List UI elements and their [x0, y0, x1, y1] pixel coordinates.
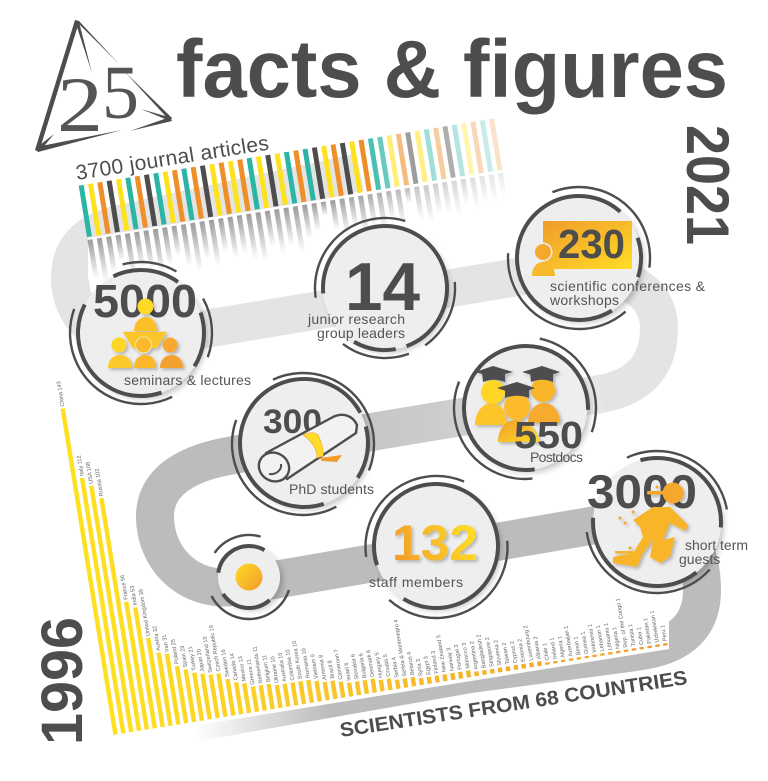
road: winding path — [70, 172, 702, 736]
icon: three graduates — [475, 366, 560, 442]
label: PhD students: PhD students — [289, 481, 374, 497]
chart labels: Bangladesh 2 — [476, 634, 488, 669]
chart labels: Nigeria 1 — [612, 626, 622, 649]
chart labels: Egypt 3 — [423, 656, 432, 675]
label: short term guests: short term — [685, 537, 748, 553]
chart labels: Canada 14 — [229, 653, 240, 681]
chart labels: Switzerland 19 — [202, 636, 214, 673]
chart labels: Portugal 3 — [454, 644, 464, 670]
chart labels: Turkey 21 — [188, 646, 198, 671]
chart labels: Lebanon 1 — [596, 625, 606, 652]
chart bars — [63, 319, 666, 735]
logo: triangle with 25 — [35, 20, 172, 152]
white mask under article bars — [88, 170, 500, 285]
chart labels: Armenia 8 — [318, 654, 328, 680]
chart title: SCIENTISTS FROM 68 COUNTRIES — [338, 667, 689, 742]
chart labels: Romania 10 — [301, 648, 312, 678]
chart labels: Chile 1 — [542, 643, 551, 661]
label: seminars and lectures: seminars & lectures — [124, 372, 251, 388]
chart labels: Japan 20 — [196, 648, 206, 672]
chart labels: New Zealand 3 — [436, 635, 448, 673]
chart labels: Greece 11 — [246, 659, 257, 685]
chart labels: Benin 1 — [573, 636, 582, 656]
chart labels: Finland 3 — [431, 650, 440, 674]
panel: start node — [191, 519, 307, 635]
chart labels: Ukraine 10 — [270, 656, 280, 683]
chart labels: Czech Republic 19 — [209, 624, 222, 672]
chart labels: Luxembourg 2 — [523, 625, 535, 661]
chart labels: Serbia & Montenegro 4 — [393, 619, 408, 677]
chart labels: Australia 10 — [278, 652, 288, 682]
chart labels: Spain 23 — [180, 645, 189, 668]
icon: running person — [613, 482, 688, 567]
panel: 3000 short term guests: 3000 — [587, 465, 697, 518]
chart labels: Denmark 6 — [366, 649, 376, 677]
chart labels: Austria 32 — [152, 625, 162, 651]
chart labels: Tunisia 1 — [628, 624, 637, 647]
panel: 132 staff members — [356, 467, 517, 627]
chart labels: Uzbekistan 1 — [650, 610, 661, 643]
panel: 132 staff members: 132 — [392, 515, 478, 571]
chart labels: Mexico 13 — [238, 656, 248, 682]
chart labels: Guinea 1 — [581, 631, 590, 654]
chart labels: Sweden 16 — [221, 649, 231, 677]
panel: 230 scientific conferences and workshops — [479, 158, 706, 358]
chart labels: Poland 25 — [171, 639, 181, 664]
chart labels: Colombia 10 — [285, 649, 296, 681]
chart labels: Croatia 5 — [383, 654, 392, 677]
white mask under country chart — [112, 612, 669, 739]
icon: presenter with screen — [532, 221, 632, 276]
chart labels: France 56 — [120, 574, 130, 600]
chart labels: Estonia 2 — [517, 638, 527, 662]
chart labels: Lithuania 1 — [604, 623, 614, 650]
panel: 300 PhD students — [207, 348, 399, 540]
journal article colour bars — [79, 118, 502, 237]
chart labels: Bulgaria 6 — [358, 653, 368, 679]
logo: triangle with 25: 2 — [57, 61, 103, 148]
chart labels: Indonesia 1 — [588, 624, 598, 653]
panel: 550 postdocs — [441, 324, 609, 492]
panel: 3000 short term guests — [557, 422, 757, 622]
logo: triangle with 25: 5 — [102, 51, 139, 135]
year 1996: 1996 — [30, 617, 95, 745]
label: junior research group leaders: junior research — [307, 311, 405, 327]
chart labels: Cyprus 2 — [510, 640, 519, 663]
chart labels: Ireland 1 — [549, 637, 559, 659]
label: short term guests: guests — [679, 551, 720, 567]
chart labels: Hungary 5 — [374, 652, 384, 678]
bar chart: scientists by country — [56, 292, 669, 735]
chart labels: Taiwan 2 — [502, 642, 511, 665]
chart labels: Algeria 1 — [557, 635, 567, 658]
chart labels: Morocco 3 — [462, 642, 472, 669]
chart labels: China 143 — [56, 381, 66, 407]
label: scientific conferences and workshops: scientific conferences & — [550, 278, 706, 294]
chart labels: Cameroon 7 — [334, 649, 344, 680]
label: scientific conferences and workshops: workshops — [549, 292, 619, 308]
chart labels: Cuba 1 — [636, 627, 645, 645]
panel: 5000 seminars and lectures: 5000 — [93, 275, 197, 327]
title: facts & figures — [176, 24, 728, 115]
chart labels: Pakistan 1 — [643, 617, 653, 644]
chart labels — [56, 292, 669, 731]
chart labels: Italy 112 — [76, 455, 86, 476]
label: staff members: staff members — [369, 574, 463, 590]
chart labels: Brazil 8 — [327, 660, 336, 679]
panel: 14 junior research group leaders — [295, 198, 475, 378]
chart labels: Belarus 4 — [407, 651, 416, 675]
chart labels: Norway 3 — [446, 647, 456, 671]
chart labels: Rep. of the Congo 1 — [616, 598, 630, 648]
chart labels: Albania 2 — [533, 636, 543, 660]
label: junior research group leaders: group leaders — [317, 325, 405, 341]
chart labels: Azerbaijan 1 — [564, 625, 575, 657]
chart labels: USA 108 — [85, 461, 95, 484]
year 2021: 2021 — [674, 125, 741, 245]
chart labels: Slovakia 6 — [350, 653, 361, 680]
chart labels: Netherlands 11 — [252, 646, 264, 684]
panel: 300 PhD students: 300 — [263, 403, 322, 441]
chart labels: Vietnam 9 — [310, 654, 320, 679]
panel: 14 junior research group leaders: 14 — [345, 249, 420, 325]
chart labels: United Kingdom 39 — [138, 588, 152, 636]
chart labels: Syria 3 — [416, 658, 424, 677]
panel: 550 postdocs: 550 — [514, 415, 583, 457]
chart labels: Russia 102 — [95, 468, 105, 497]
label: Postdocs: Postdocs — [530, 449, 583, 465]
chart labels: Serbia 4 — [391, 657, 401, 678]
chart labels: Belgium 11 — [262, 654, 272, 682]
chart labels: Slovenia 2 — [493, 639, 503, 666]
chart labels: Iran 31 — [162, 634, 171, 652]
heading: 3700 journal articles: 3700 journal articles — [74, 132, 270, 185]
chart labels: Argentina 2 — [469, 641, 480, 670]
article bar reflections — [87, 173, 511, 289]
chart labels: India 53 — [130, 585, 139, 606]
panel: 230 scientific conferences and workshops: 230 — [558, 221, 625, 267]
icon: diploma scroll — [254, 415, 357, 487]
chart labels: South Korea 10 — [292, 640, 304, 680]
chart labels: Israel 6 — [344, 662, 353, 681]
chart labels: Singapore 2 — [485, 637, 496, 667]
icon: seminar audience — [108, 298, 183, 368]
chart labels: Peru 1 — [660, 624, 669, 642]
panel: 5000 seminars and lectures — [44, 236, 251, 430]
